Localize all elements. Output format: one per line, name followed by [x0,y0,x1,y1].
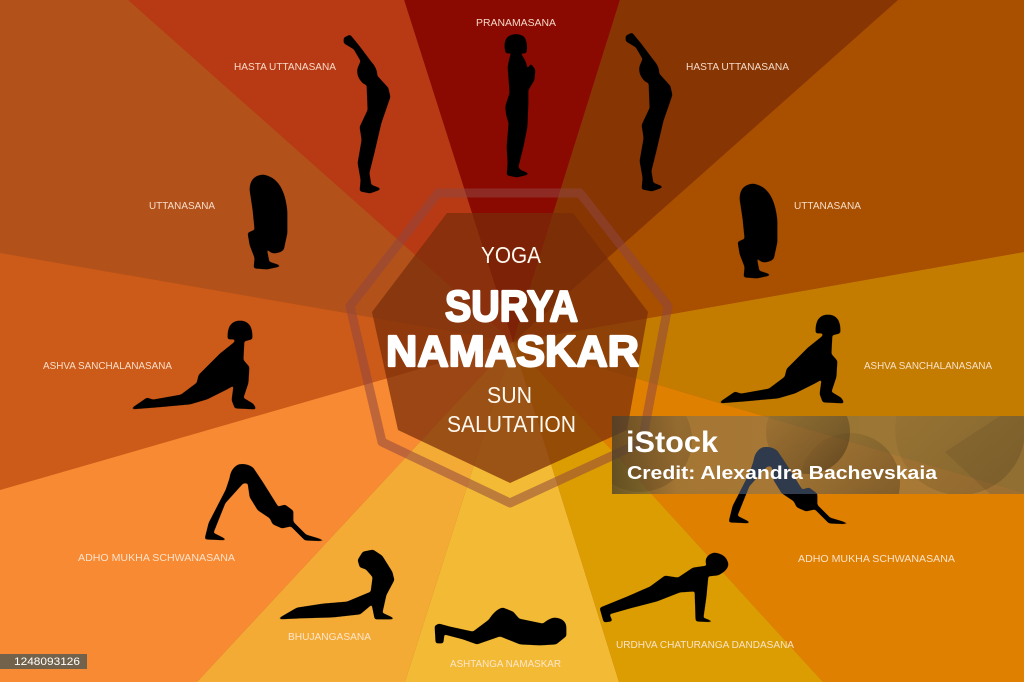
pose: bhujangasana [278,550,395,619]
label: pranamasana: PRANAMASANA [476,18,556,29]
label: hasta uttanasana left: HASTA UTTANASANA [234,62,336,73]
label: bhujangasana: BHUJANGASANA [288,632,371,643]
label: uttanasana left: UTTANASANA [149,201,215,212]
title: sun: SUN [487,382,532,408]
pose: hasta uttanasana right [626,33,672,191]
label: ashva sanchalanasana right: ASHVA SANCHALANASANA [864,361,992,372]
label: adho mukha schwanasana left: ADHO MUKHA SCHWANASANA [78,553,235,564]
pose: ashva sanchalanasana left [131,321,256,409]
pose: ashva sanchalanasana right [719,315,844,403]
label: ashtanga namaskar: ASHTANGA NAMASKAR [450,659,561,670]
watermark logo: iStock [626,426,718,459]
image id tag: 1248093126 [14,656,80,668]
dog pose seen through watermark [738,447,817,494]
title: yoga: YOGA [481,242,542,268]
label: adho mukha schwanasana right: ADHO MUKHA SCHWANASANA [798,554,955,565]
pose: adho mukha schwanasana right [729,447,850,524]
title: namaskar: NAMASKAR [386,327,639,376]
label: uttanasana right: UTTANASANA [794,201,861,212]
label: hasta uttanasana right: HASTA UTTANASANA [686,62,789,73]
pose: uttanasana right [738,184,777,278]
label: ashva sanchalanasana left: ASHVA SANCHALANASANA [43,361,172,372]
title: surya: SURYA [445,282,578,331]
pose: ashtanga namaskar [435,608,566,645]
image id tag [0,654,87,669]
pose: adho mukha schwanasana left [205,464,326,541]
watermark credit: Credit: Alexandra Bachevskaia [627,463,938,483]
watermark panel [612,416,1024,494]
watermark banner [612,416,1024,494]
label: urdhva chaturanga dandasana: URDHVA CHATURANGA DANDASANA [616,640,794,651]
central badge hexagon [372,213,648,483]
central badge outer ring [350,193,668,503]
pose: pranamasana [505,34,535,177]
pose: urdhva chaturanga dandasana [600,553,728,622]
title: salutation: SALUTATION [447,411,576,437]
title block [386,242,639,437]
pose: uttanasana left [248,175,287,269]
pose: hasta uttanasana left [344,35,390,193]
